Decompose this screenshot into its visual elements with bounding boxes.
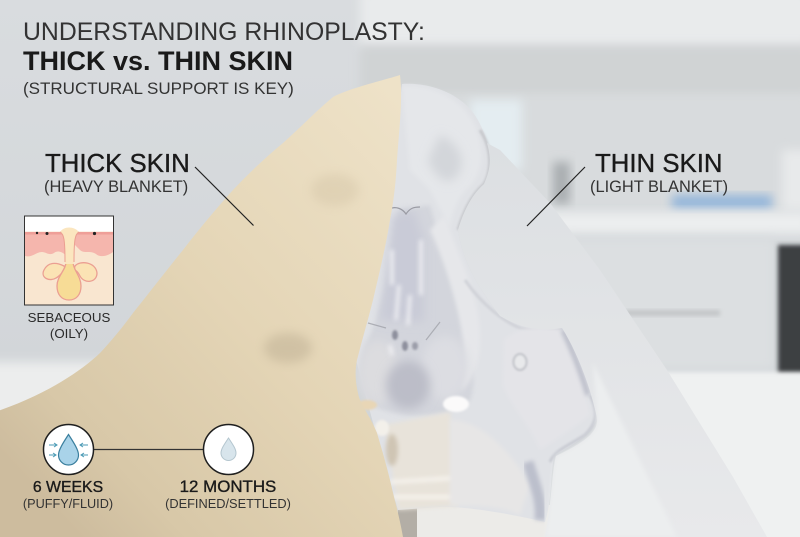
label: thick skin xyxy=(44,150,190,196)
title: (STRUCTURAL SUPPORT IS KEY) xyxy=(23,79,294,98)
pointer line: thick skin xyxy=(195,167,254,226)
label: thin skin: (LIGHT BLANKET) xyxy=(590,178,728,196)
support post xyxy=(398,505,417,537)
label: thin skin: THIN SKIN xyxy=(595,150,723,178)
label: thin skin xyxy=(590,150,728,196)
caption: sebaceous xyxy=(28,310,110,341)
icon: 12 months settled drop xyxy=(204,424,254,474)
caption: 12 months: (DEFINED/SETTLED) xyxy=(165,496,291,511)
caption: 6 weeks: 6 WEEKS xyxy=(33,479,103,496)
caption: 12 months xyxy=(165,477,291,511)
icon: sebaceous gland skin diagram xyxy=(24,216,114,305)
label: thick skin: (HEAVY BLANKET) xyxy=(44,178,188,196)
caption: 6 weeks xyxy=(23,479,113,511)
timeline connector xyxy=(93,448,204,450)
pointer line: thin skin xyxy=(527,167,585,226)
caption: 12 months: 12 MONTHS xyxy=(180,477,276,496)
title: UNDERSTANDING RHINOPLASTY: xyxy=(23,19,425,46)
label: thick skin: THICK SKIN xyxy=(45,150,190,178)
thick skin beige blanket xyxy=(0,75,403,537)
icon: 6 weeks fluid drop xyxy=(44,424,94,474)
clear nose model xyxy=(356,84,597,522)
title xyxy=(23,19,425,98)
thin skin sheer blanket xyxy=(458,143,767,537)
caption: sebaceous: (OILY) xyxy=(50,326,88,341)
title: THICK vs. THIN SKIN xyxy=(23,46,293,76)
caption: sebaceous: SEBACEOUS xyxy=(28,310,110,325)
caption: 6 weeks: (PUFFY/FLUID) xyxy=(23,497,113,511)
